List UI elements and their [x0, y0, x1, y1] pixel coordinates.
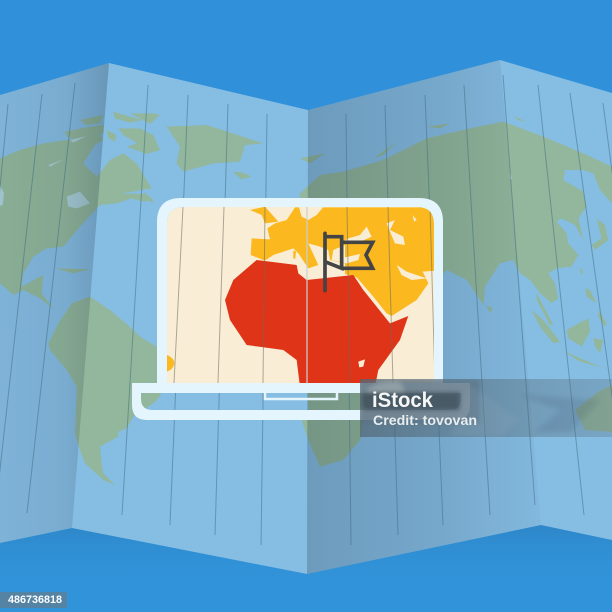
laptop notch — [265, 393, 337, 399]
Lake Baikal — [510, 172, 512, 180]
left island — [167, 354, 174, 372]
laptop screen — [167, 207, 434, 383]
Australia — [575, 385, 612, 432]
watermark credit: Credit: tovovan — [373, 413, 477, 428]
Eurasia — [300, 116, 612, 370]
Borneo — [567, 318, 590, 347]
watermark logo: iStock — [372, 389, 433, 412]
meridian lines — [0, 75, 612, 545]
map shadow — [0, 525, 612, 585]
image id badge: 486736818 — [8, 594, 62, 606]
Japan — [592, 218, 608, 250]
Java strip — [562, 350, 608, 369]
fold shading — [0, 63, 109, 543]
continents — [0, 112, 612, 485]
lakes and stripes — [0, 136, 90, 208]
Africa — [302, 393, 364, 466]
screen meridians — [174, 207, 435, 383]
Philippines — [585, 288, 597, 303]
laptop — [132, 198, 470, 420]
Malay peninsula — [537, 293, 553, 325]
South America — [48, 297, 163, 485]
Sumatra — [532, 310, 560, 343]
flag icon — [325, 233, 373, 291]
Africa in red — [225, 260, 408, 387]
image id badge — [0, 592, 67, 608]
Taiwan — [579, 267, 583, 275]
Europe and Asia in yellow — [165, 205, 443, 372]
North America — [0, 112, 160, 308]
seas — [299, 207, 324, 220]
laptop lid frame — [157, 198, 443, 383]
UK — [250, 207, 278, 223]
Sulawesi — [593, 338, 603, 353]
laptop base — [132, 383, 470, 420]
watermark panel — [360, 379, 612, 437]
Lake Victoria — [358, 359, 365, 367]
Sardinia — [293, 251, 296, 259]
Greenland and Caribbean — [55, 125, 263, 273]
